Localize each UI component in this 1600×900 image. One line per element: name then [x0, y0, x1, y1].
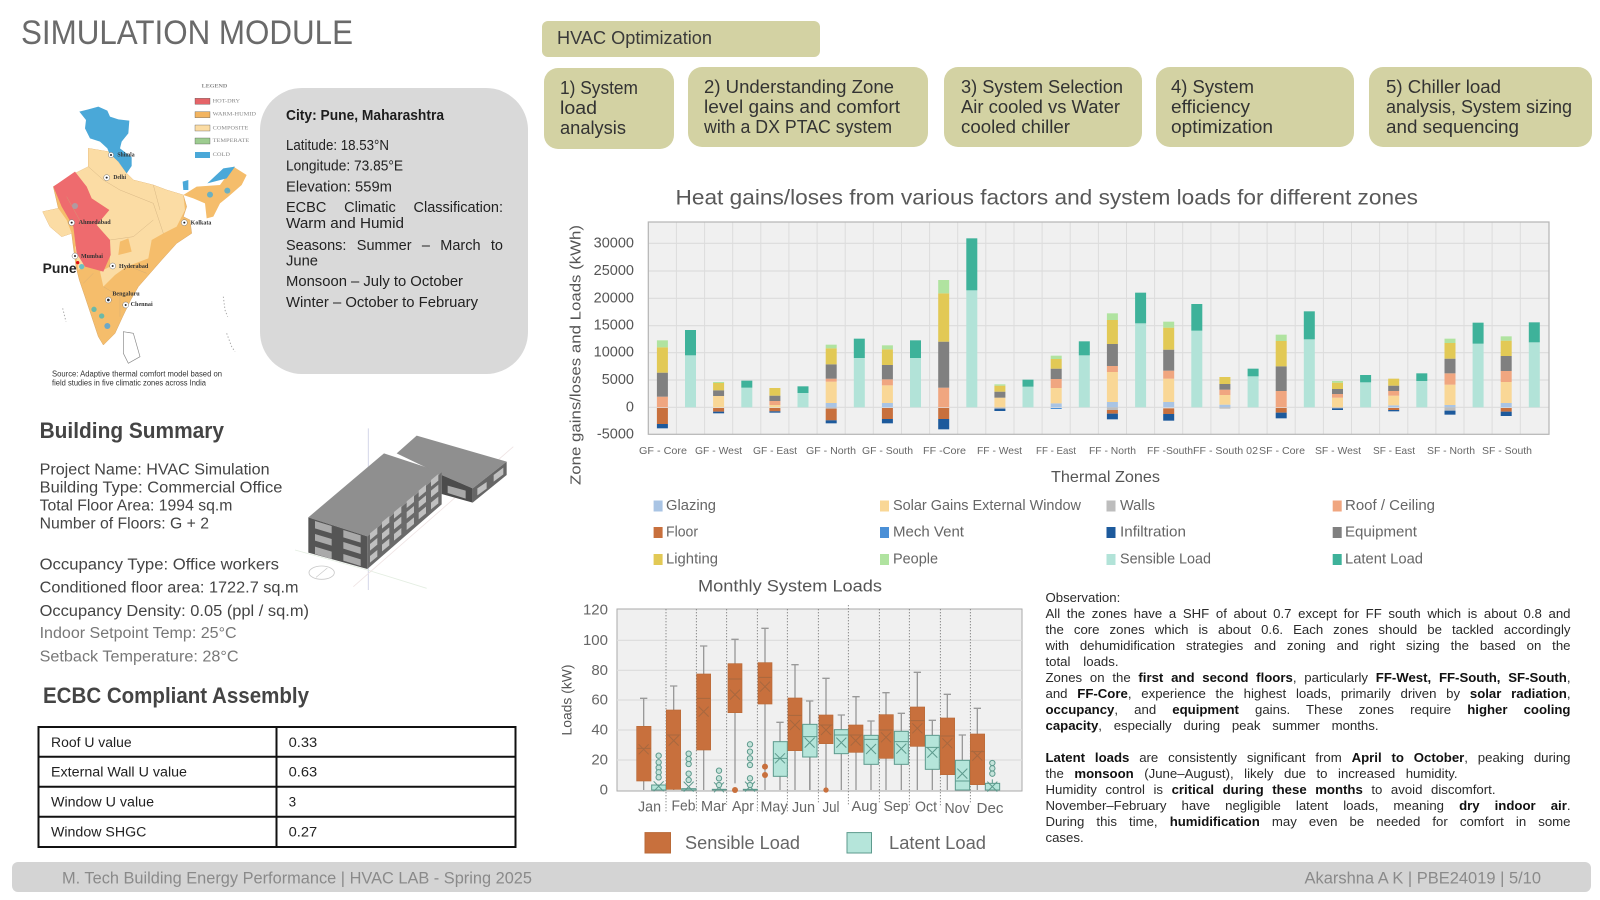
map of India climate zones: LEGEND [202, 84, 227, 90]
stacked bar chart: zone heat gains and loads [648, 222, 1549, 434]
text: total loads. [1046, 654, 1118, 669]
month labels: Dec [976, 800, 1004, 817]
month labels: Jan [638, 798, 661, 816]
x axis title: Thermal Zones [1051, 469, 1160, 486]
step 5: 5) Chiller load [1386, 77, 1501, 97]
x axis zone labels: SF - North [1427, 445, 1475, 457]
step 3: Air cooled vs Water [961, 97, 1120, 117]
boxes June to December [803, 605, 1000, 807]
heading: HVAC Optimization: HVAC Optimization [557, 28, 712, 48]
footer bar: Akarshna A K | PBE24019 | 5/10 [1304, 868, 1541, 888]
map of India climate zones: Pune [43, 261, 77, 276]
legend: heat gain factors: Solar Gains External Window [893, 497, 1081, 514]
building summary text: Total Floor Area: 1994 sq.m [40, 498, 232, 514]
zone: GF - South [882, 340, 921, 423]
legend: heat gain factors: Lighting [666, 550, 718, 568]
y axis tick labels: 5000 [602, 372, 634, 388]
month labels: Jul [822, 799, 840, 816]
y ticks: 100 [583, 632, 608, 649]
legend: heat gain factors: Walls [1120, 497, 1155, 514]
map of India climate zones: Bengaluru [112, 291, 140, 297]
legend: heat gain factors: Mech Vent [893, 524, 965, 540]
x axis zone labels: GF - North [806, 445, 856, 457]
y axis tick labels: 15000 [594, 318, 634, 334]
text: Zones on the first and second floors, particularly FF-West, FF-South, SF-South, [1046, 670, 1570, 685]
text: cases. [1046, 830, 1084, 845]
step 3: cooled chiller [961, 117, 1070, 137]
y axis tick labels: 25000 [594, 263, 634, 279]
map of India climate zones: TEMPERATE [213, 138, 249, 144]
text: During this time, humidification may even be needed for comfort in some [1046, 814, 1570, 829]
map source note: field studies in five climatic zones across India [52, 378, 207, 388]
map of India climate zones: Hyderabad [119, 264, 149, 270]
y axis tick labels: -5000 [597, 426, 634, 442]
step 3 [944, 67, 1142, 147]
map source note [52, 370, 222, 388]
map of India climate zones: Shimla [117, 152, 135, 158]
legend: heat gain factors: Infiltration [1120, 524, 1186, 540]
zone: FF - East [1051, 341, 1090, 409]
table: ECBC assembly values: 0.33 [289, 735, 317, 750]
x axis zone labels: FF - East [1036, 445, 1076, 457]
table: ECBC assembly values [38, 727, 516, 847]
text: All the zones have a SHF of about 0.7 except for FF south which is about 0.8 and [1046, 606, 1570, 621]
x axis zone labels: FF -South [1147, 445, 1193, 457]
map of India climate zones: COLD [213, 152, 230, 158]
y axis title: Zone gains/loses and Loads (kWh) [568, 225, 584, 485]
panel: city climate info: Latitude: 18.53°N [286, 138, 389, 154]
x axis zone labels: GF - East [753, 445, 797, 457]
box plot: monthly system loads [560, 602, 1022, 817]
table: ECBC assembly values: Window SHGC [51, 824, 147, 840]
step 2: 2) Understanding Zone [704, 77, 894, 97]
legend: sensible and latent load [645, 833, 986, 853]
y axis tick labels: 20000 [594, 290, 634, 306]
map of India climate zones: Ahmedabad [79, 220, 111, 226]
table: ECBC assembly values: 0.63 [289, 764, 317, 780]
x axis zone labels: SF - East [1373, 445, 1415, 457]
building summary text [40, 462, 309, 666]
text: with dehumidification strategies and zoning and right sizing the based on the [1046, 638, 1570, 653]
legend: heat gain factors: Roof / Ceiling [1345, 497, 1435, 514]
building summary text: Occupancy Type: Office workers [40, 556, 279, 574]
zone: GF - North [826, 339, 865, 423]
panel: city climate info: Elevation: 559m [286, 179, 392, 195]
month labels: Nov [944, 800, 970, 817]
map of India climate zones: Delhi [113, 175, 126, 181]
text: occupancy, and equipment gains. These zones require higher cooling [1046, 702, 1570, 717]
month labels: Mar [701, 798, 726, 815]
zone: SF - North [1444, 323, 1484, 415]
table: ECBC assembly values: 0.27 [289, 824, 317, 840]
footer bar [12, 862, 1591, 892]
x axis zone labels: FF - West [977, 445, 1022, 457]
building summary text: Setback Temperature: 28°C [40, 648, 239, 666]
footer bar: M. Tech Building Energy Performance | HVAC LAB - Spring 2025 [62, 868, 532, 888]
step 2: level gains and comfort [704, 97, 900, 117]
zone: SF - Core [1276, 311, 1315, 418]
y axis tick labels: 0 [626, 399, 634, 415]
map of India climate zones: WARM-HUMID [213, 112, 256, 118]
map of India climate zones: Kolkata [191, 221, 211, 227]
y ticks: 0 [600, 782, 608, 798]
panel: city climate info: Warm and Humid [286, 216, 404, 232]
panel: city climate info: City: Pune, Maharashtra [286, 107, 445, 124]
heading: Monthly System Loads: Monthly System Loads [698, 576, 882, 596]
text: capacity, especially during peak summer months. [1046, 718, 1378, 733]
month labels [638, 798, 1004, 817]
table: ECBC assembly values: Window U value [51, 794, 154, 810]
map of India climate zones: Chennai [131, 302, 153, 308]
heading: Building Summary: Building Summary [40, 418, 225, 443]
x axis zone labels [639, 445, 1532, 457]
month labels: Jun [792, 799, 815, 816]
step 4: efficiency [1171, 97, 1250, 117]
panel: city climate info [260, 88, 528, 374]
zone: SF - East [1388, 373, 1427, 411]
building summary text: Occupancy Density: 0.05 (ppl / sq.m) [40, 603, 309, 620]
building 3D model [295, 428, 513, 590]
building summary text: Project Name: HVAC Simulation [40, 462, 270, 478]
y ticks: 60 [591, 692, 608, 708]
text: Observation: [1046, 590, 1120, 605]
month labels: Sep [884, 798, 908, 815]
y axis tick labels: 30000 [594, 235, 634, 251]
legend: heat gain factors: Latent Load [1345, 550, 1423, 568]
y ticks: 120 [583, 602, 608, 618]
x axis zone labels: SF - South [1482, 445, 1532, 457]
zone: FF - West [994, 380, 1034, 411]
step 1 [544, 68, 674, 149]
y axis tick labels: 10000 [594, 345, 634, 361]
step 4: optimization [1171, 117, 1273, 137]
table: ECBC assembly values: Roof U value [51, 735, 132, 750]
step 3: 3) System Selection [961, 77, 1123, 97]
step 1: analysis [560, 118, 626, 138]
legend: heat gain factors: Equipment [1345, 524, 1418, 540]
step 2 [688, 67, 928, 147]
step 4: 4) System [1171, 77, 1254, 97]
legend: heat gain factors [654, 497, 1435, 568]
map of India climate zones: COMPOSITE [213, 125, 248, 131]
y axis title: Loads (kW): Loads (kW) [560, 664, 574, 736]
x axis zone labels: FF - North [1089, 445, 1136, 457]
zone: SF - West [1332, 375, 1371, 410]
building summary text: Number of Floors: G + 2 [40, 516, 209, 532]
legend: heat gain factors: Floor [666, 524, 698, 540]
y ticks: 20 [591, 752, 608, 768]
step 5 [1369, 67, 1592, 147]
city panel line: seasons: Seasons: Summer – March to [286, 238, 503, 254]
zone: GF - West [713, 381, 752, 413]
zone: FF - South 02 [1219, 369, 1259, 409]
boxes January to June [637, 609, 810, 812]
zone: FF - Core [938, 238, 977, 429]
y ticks [583, 602, 608, 798]
text: Latent loads are consistently significant from April to October, peaking during [1046, 750, 1571, 765]
x axis zone labels: SF - Core [1259, 445, 1305, 457]
month labels: Aug [852, 798, 878, 815]
map of India climate zones: HOT-DRY [213, 98, 240, 104]
zone: FF - South [1163, 304, 1202, 421]
legend: heat gain factors: Sensible Load [1120, 550, 1211, 568]
x axis zone labels: GF - South [862, 445, 913, 457]
x axis zone labels: GF - West [695, 445, 742, 457]
text: the monsoon (June–August), likely due to increased humidity. [1046, 766, 1458, 781]
legend: sensible and latent load: Sensible Load [685, 833, 800, 853]
map source note: Source: Adaptive thermal comfort model based on [52, 370, 222, 378]
heading: heat gains chart title: Heat gains/loses from various factors and system loads for different zones [676, 186, 1418, 210]
panel: city climate info: Longitude: 73.85°E [286, 159, 403, 175]
legend: sensible and latent load: Latent Load [889, 833, 986, 853]
map of India climate zones: Mumbai [81, 254, 103, 260]
month labels: Oct [915, 798, 938, 816]
heading: ECBC Compliant Assembly: ECBC Compliant Assembly [43, 683, 310, 708]
map of India climate zones [43, 84, 256, 363]
x axis zone labels: FF - South 02 [1193, 445, 1258, 457]
month labels: Feb [672, 798, 696, 814]
zone: GF - Core [657, 330, 696, 428]
observation text block [1046, 590, 1571, 845]
building summary text: Conditioned floor area: 1722.7 sq.m [40, 580, 299, 596]
panel: city climate info: June [286, 254, 318, 270]
step 2: with a DX PTAC system [703, 117, 892, 137]
building summary text: Indoor Setpoint Temp: 25°C [40, 625, 237, 642]
panel: city climate info: Monsoon – July to October [286, 274, 463, 290]
step 1: 1) System [560, 78, 638, 98]
y ticks: 40 [591, 722, 608, 738]
title: SIMULATION MODULE [21, 14, 353, 52]
month labels: May [760, 798, 788, 816]
legend: heat gain factors: Glazing [666, 497, 716, 514]
heading: HVAC Optimization [542, 21, 820, 57]
x axis zone labels: GF - Core [639, 445, 687, 457]
zone: GF - East [769, 386, 808, 413]
x axis zone labels: SF - West [1315, 445, 1361, 457]
step 1: load [560, 98, 597, 118]
y axis tick labels [594, 235, 634, 442]
panel: city climate info: Winter – October to February [286, 295, 479, 311]
table: ECBC assembly values: 3 [289, 794, 296, 810]
y ticks: 80 [591, 662, 608, 679]
zone: FF - North [1107, 293, 1146, 419]
month labels: Apr [732, 798, 754, 815]
table: ECBC assembly values: External Wall U value [51, 764, 187, 780]
text: November–February have negligible latent loads, meaning dry indoor air. [1046, 798, 1570, 813]
building summary text: Building Type: Commercial Office [40, 480, 282, 496]
x axis zone labels: FF -Core [923, 445, 966, 457]
legend: heat gain factors: People [893, 550, 938, 568]
text: Humidity control is critical during these months to avoid discomfort. [1046, 782, 1496, 797]
step 5: and sequencing [1386, 117, 1519, 137]
text: the core zones which is about 0.6. Each zones should be tackled accordingly [1046, 622, 1570, 637]
zone: SF - South [1501, 322, 1540, 416]
city panel line: ECBC classification: ECBC Climatic Classification: [286, 200, 503, 216]
step 5: analysis, System sizing [1386, 97, 1572, 117]
text: and FF-Core, experience the highest loads, primarily driven by solar radiation, [1046, 686, 1571, 701]
step 4 [1156, 67, 1354, 147]
